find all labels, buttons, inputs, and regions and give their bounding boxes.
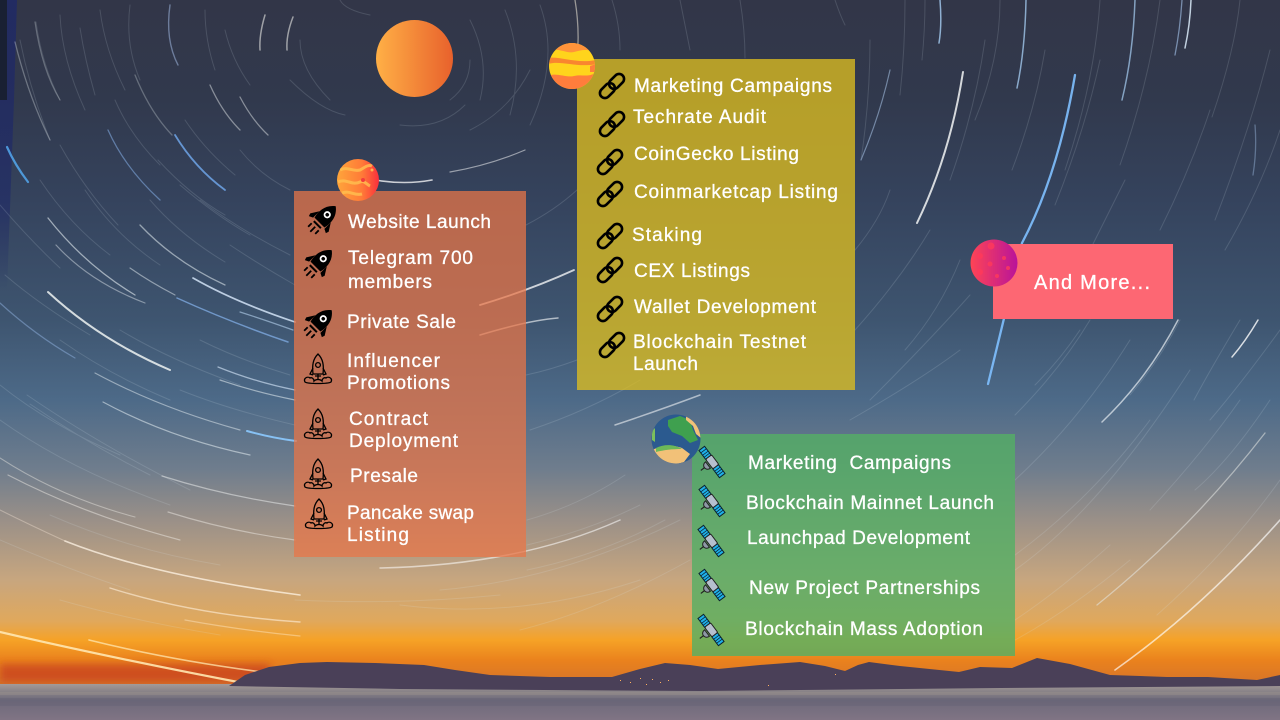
text: Coinmarketcap Listing: Coinmarketcap Listing [634,182,838,203]
text: Blockchain Testnet Launch: Launch [633,354,698,375]
icon: satellite [691,485,725,523]
text: Private Sale: Private Sale [347,312,456,333]
text: CoinGecko Listing: CoinGecko Listing [634,144,799,165]
text: Presale: Presale [350,466,418,487]
icon: outline rocket [305,409,331,438]
icon: solid rocket [301,197,345,241]
decorative orange sun [376,20,453,97]
text: Influencer Promotions: Promotions [347,373,450,394]
text: New Project Partnerships: New Project Partnerships [749,578,980,599]
icon: earth globe [652,414,701,466]
icon: solid rocket [297,301,341,345]
icon: chain link [598,110,626,138]
icon: chain link [596,222,624,250]
text: And More: And More... [1034,272,1150,294]
text: Wallet Development: Wallet Development [634,297,817,318]
text: Website Launch: Website Launch [348,212,491,233]
icon: chain link [596,180,624,208]
icon: chain link [596,256,624,284]
text: Telegram 700 members: Telegram 700 [348,248,473,269]
text: Contract Deployment: Deployment [349,431,459,452]
icon: chain link [598,72,626,100]
text: Marketing Campaigns: Marketing Campaigns [748,453,951,474]
panel: yellow roadmap phase [548,42,855,390]
text: Marketing Campaigns: Marketing Campaigns [634,76,832,97]
icon: chain link [598,331,626,359]
text: Telegram 700 members: members [348,272,432,293]
text: Contract Deployment: Contract [349,409,429,430]
icon: solid rocket [297,241,341,285]
icon: satellite [691,569,725,607]
icon: striped yellow planet [548,42,596,90]
icon: outline rocket [305,459,331,488]
text: Influencer Promotions: Influencer [347,351,441,372]
text: Launchpad Development: Launchpad Development [747,528,971,549]
icon: outline rocket [305,354,331,384]
icon: flame planet [337,159,379,201]
icon: satellite [690,525,724,563]
panel: green roadmap phase [652,414,1015,656]
text: Pancake swap Listing: Listing [347,525,409,546]
text: Blockchain Mass Adoption: Blockchain Mass Adoption [745,619,983,640]
text: Techrate Audit: Techrate Audit [633,107,767,128]
icon: chain link [596,148,624,176]
text: Blockchain Testnet Launch: Blockchain Testnet [633,332,807,353]
icon: pink planet [970,240,1018,286]
panel: and more [970,240,1173,319]
icon: outline rocket [306,499,332,528]
text: Staking: Staking [632,225,702,246]
icon: satellite [690,614,724,652]
text: Pancake swap Listing: Pancake swap [347,503,474,524]
icon: satellite [691,446,725,484]
text: CEX Listings: CEX Listings [634,261,750,282]
text: Blockchain Mainnet Launch: Blockchain Mainnet Launch [746,493,994,514]
panel: orange roadmap phase [294,159,526,557]
icon: chain link [596,295,624,323]
